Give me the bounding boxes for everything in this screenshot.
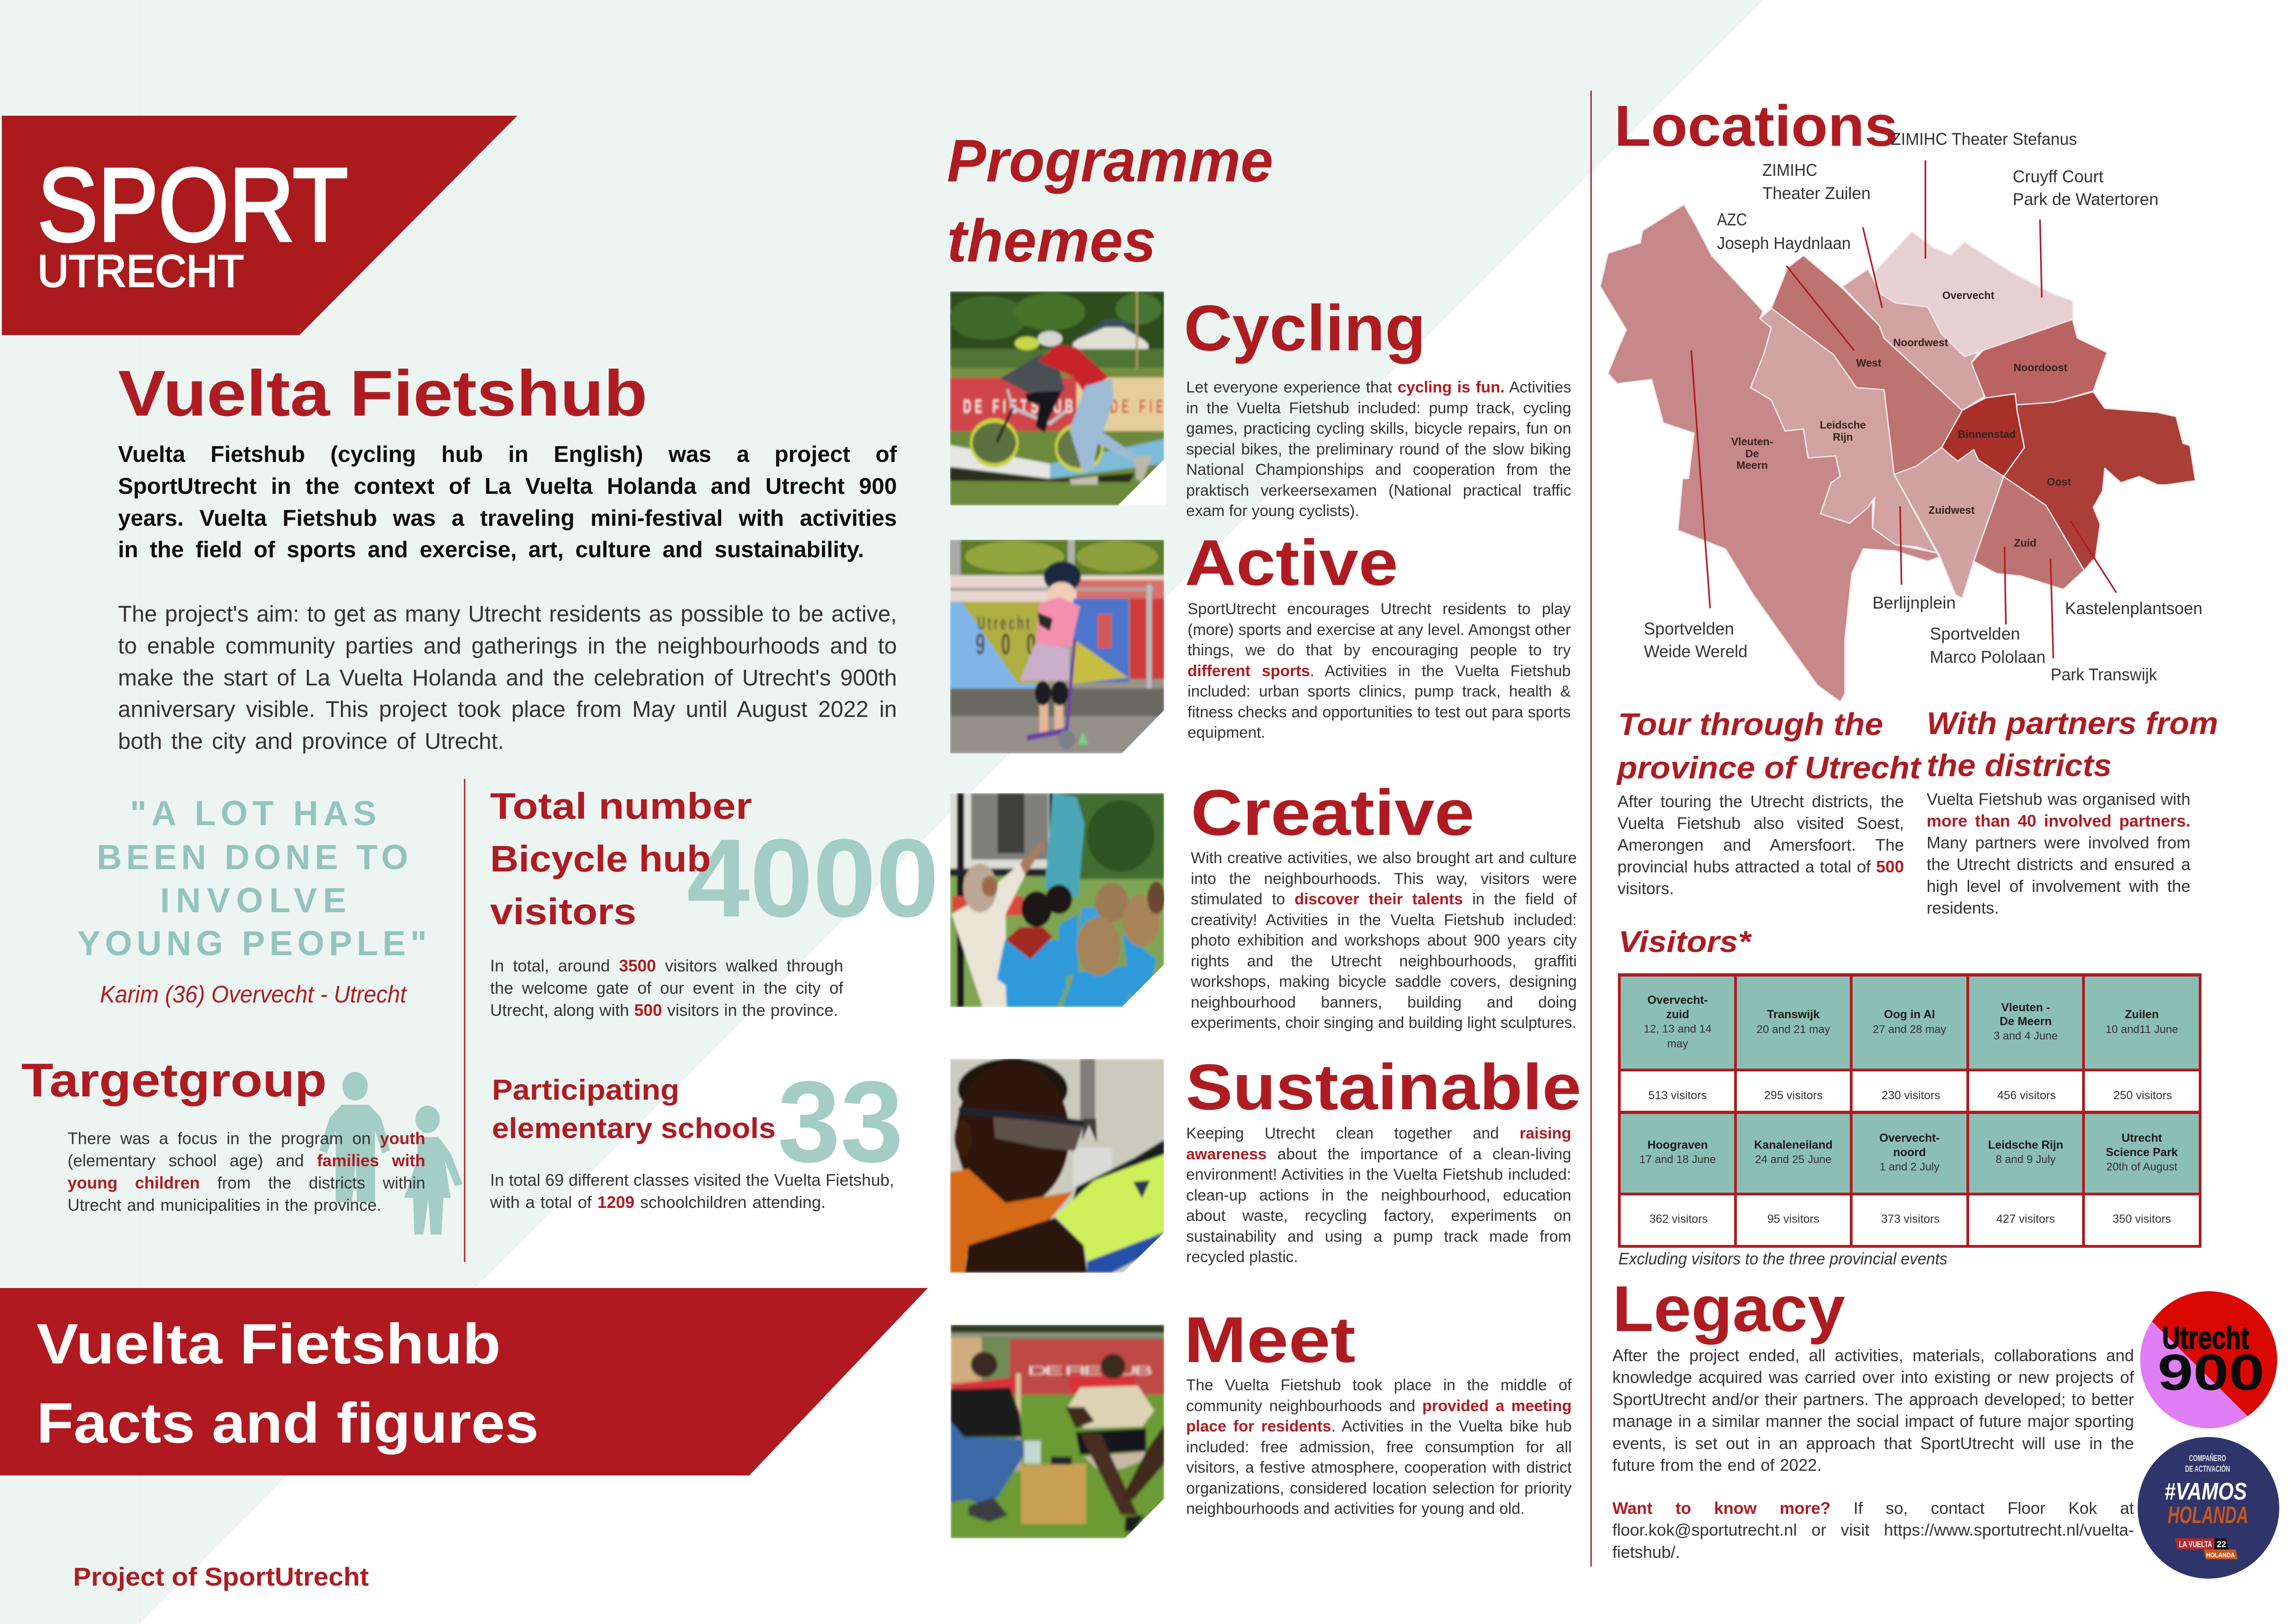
map location labels: AZC bbox=[1717, 210, 1747, 229]
text: target group: (elementary school age) and families with bbox=[68, 1151, 425, 1170]
map location labels: Park Transwijk bbox=[2051, 665, 2157, 684]
text: project aim: both the city and province of Utrecht. bbox=[118, 729, 504, 754]
text: creative: neighbourhood banners, building and doing bbox=[1191, 993, 1577, 1011]
text: meet: visitors, a festive atmosphere, cooperation with district bbox=[1186, 1459, 1572, 1476]
text: creative: creativity! Activities in the Vuelta Fietshub included: bbox=[1191, 911, 1577, 928]
text: legacy: future from the end of 2022. bbox=[1612, 1456, 1822, 1475]
logo: Utrecht 900 bbox=[2140, 1291, 2277, 1428]
table: visitors per location: Transwijk bbox=[1767, 1008, 1820, 1021]
table: visitors per location: 3 and 4 June bbox=[1994, 1030, 2058, 1042]
text: legacy: manage in a similar manner the social impact of future major sporting bbox=[1612, 1412, 2134, 1431]
map location labels: Marco Pololaan bbox=[1930, 647, 2046, 666]
table: visitors per location: 20 and 21 may bbox=[1757, 1023, 1830, 1036]
text: provincial tour: Vuelta Fietshub also visited Soest, bbox=[1617, 814, 1904, 833]
table: visitors per location: 8 and 9 July bbox=[1996, 1153, 2056, 1166]
text: intro bold: SportUtrecht in the context of La Vuelta Holanda and Utrecht 900 bbox=[118, 474, 897, 499]
text: active: different sports. Activities in the Vuelta Fietshub bbox=[1188, 662, 1571, 679]
text: sustainable: clean-up actions in the neighbourhood, education bbox=[1186, 1187, 1571, 1204]
heading: Cycling: Cycling bbox=[1184, 292, 1426, 364]
heading: Creative: Creative bbox=[1191, 776, 1474, 849]
text: provincial tour: visitors. bbox=[1617, 879, 1674, 898]
text: creative: workshops, making bicycle saddle covers, designing bbox=[1191, 973, 1577, 990]
text: meet: included: free admission, free consumption for all bbox=[1186, 1438, 1572, 1456]
text: partners: residents. bbox=[1927, 898, 1999, 917]
table: visitors per location: 24 and 25 June bbox=[1755, 1153, 1832, 1166]
table: visitors per location: 427 visitors bbox=[1996, 1213, 2055, 1226]
logo: Vamos Holanda: 22 bbox=[2217, 1540, 2226, 1549]
table: visitors per location: Leidsche Rijn bbox=[1988, 1139, 2063, 1151]
heading: Legacy: Legacy bbox=[1612, 1272, 1845, 1345]
text: provincial tour: After touring the Utrecht districts, the bbox=[1617, 792, 1904, 811]
photo: meet bbox=[951, 1325, 1164, 1538]
map: Utrecht districts: Meern bbox=[1736, 459, 1768, 471]
big number: 4000: 4000 bbox=[687, 816, 939, 940]
map: Utrecht districts bbox=[1600, 160, 2195, 702]
text: cycling: exam for young cyclists). bbox=[1186, 502, 1359, 520]
map: Utrecht districts: De bbox=[1745, 448, 1759, 460]
map: Utrecht districts: Binnenstad bbox=[1958, 428, 2016, 440]
text: contact: floor.kok@sportutrecht.nl or visit https://www.sportutrecht.nl/vuelta- bbox=[1612, 1520, 2134, 1539]
logo: Utrecht 900: Utrecht bbox=[2162, 1320, 2249, 1356]
logo banner: SportUtrecht bbox=[2, 116, 517, 335]
table: visitors per location: zuid bbox=[1666, 1008, 1689, 1021]
logo: Vamos Holanda: LA VUELTA bbox=[2179, 1540, 2212, 1549]
map: Utrecht districts: Noordoost bbox=[2014, 361, 2067, 373]
heading: Locations: Locations bbox=[1614, 94, 1898, 158]
text: sustainable: recycled plastic. bbox=[1186, 1248, 1298, 1266]
map: Utrecht districts: Vleuten- bbox=[1731, 436, 1773, 448]
text: partners bbox=[1927, 788, 2190, 919]
text: provincial tour bbox=[1617, 790, 1904, 899]
text: partners: the Utrecht districts and ensured a bbox=[1927, 855, 2190, 874]
heading: total number of visitors: visitors bbox=[490, 891, 636, 932]
quote: young people: YOUNG PEOPLE" bbox=[77, 924, 427, 963]
heading: participating schools: elementary schools bbox=[492, 1113, 776, 1145]
table: visitors per location: 373 visitors bbox=[1881, 1213, 1940, 1226]
text: creative: rights and the Utrecht neighbourhoods, graffiti bbox=[1191, 952, 1577, 970]
table: visitors per location: 456 visitors bbox=[1997, 1089, 2056, 1102]
text: total visitors: Utrecht, along with 500 visitors in the province. bbox=[490, 1001, 838, 1020]
table: visitors per location: 295 visitors bbox=[1764, 1089, 1822, 1102]
text: cycling: games, practicing cycling skills, bicycle repairs, fun on bbox=[1186, 420, 1571, 437]
table: visitors per location: Zuilen bbox=[2125, 1008, 2159, 1021]
table footnote: Excluding visitors to the three provincial events bbox=[1618, 1249, 1947, 1268]
heading: Programme themes: Programme bbox=[947, 127, 1273, 194]
heading: participating schools: Participating bbox=[492, 1074, 679, 1106]
text: sustainable: about waste, recycling factory, experiments on bbox=[1186, 1207, 1571, 1225]
table: visitors per location: 513 visitors bbox=[1648, 1089, 1707, 1102]
map location labels: Sportvelden bbox=[1644, 619, 1734, 638]
map location labels: ZIMIHC Theater Stefanus bbox=[1891, 130, 2077, 149]
text: meet: neighbourhoods and activities for young and old. bbox=[1186, 1500, 1525, 1518]
map location labels: Kastelenplantsoen bbox=[2065, 599, 2202, 618]
table: visitors per location bbox=[1618, 973, 2202, 1248]
photo: meet: DE FIET UB bbox=[1027, 1364, 1153, 1378]
text: sustainable: sustainability and using a pump track made from bbox=[1186, 1227, 1571, 1245]
icon: adult and child figures bbox=[319, 1072, 463, 1235]
heading: With partners from the districts: With partners from bbox=[1927, 706, 2218, 741]
map location labels: Theater Zuilen bbox=[1762, 184, 1871, 203]
map: Utrecht districts: Zuidwest bbox=[1928, 504, 1975, 516]
table: visitors per location: Overvecht- bbox=[1648, 994, 1708, 1007]
photo: active: Utrecht bbox=[977, 612, 1030, 634]
table: visitors per location: Utrecht bbox=[2121, 1132, 2162, 1145]
text: active: equipment. bbox=[1188, 724, 1265, 741]
map: Utrecht districts: Rijn bbox=[1833, 431, 1853, 443]
table: visitors per location: Science Park bbox=[2106, 1146, 2178, 1159]
map location labels bbox=[1644, 130, 2202, 684]
text: legacy: knowledge acquired was carried over into existing or new projects of bbox=[1612, 1368, 2134, 1387]
text: active: included: urban sports clinics, pump track, health & bbox=[1188, 683, 1571, 700]
text: active: (more) sports and exercise at any level. Amongst other bbox=[1188, 621, 1571, 639]
text: total visitors: In total, around 3500 visitors walked through bbox=[490, 956, 843, 975]
photo: active bbox=[950, 540, 1164, 753]
footer: project credit: Project of SportUtrecht bbox=[73, 1562, 369, 1591]
photo: creative bbox=[950, 793, 1165, 1007]
text: project aim bbox=[118, 598, 897, 758]
text: cycling: National Championships and cooperation from the bbox=[1186, 461, 1571, 479]
map: Utrecht districts: West bbox=[1856, 357, 1882, 369]
logo: Vamos Holanda bbox=[2138, 1437, 2279, 1579]
map: Utrecht districts: Overvecht bbox=[1942, 289, 1995, 301]
logo: Vamos Holanda: COMPAÑERO bbox=[2189, 1453, 2226, 1463]
table: visitors per location: 350 visitors bbox=[2113, 1213, 2171, 1226]
table: visitors per location: noord bbox=[1893, 1146, 1926, 1159]
quote: young people bbox=[77, 794, 427, 963]
text: provincial tour: Amerongen and Amersfoort. The bbox=[1617, 835, 1904, 854]
heading: participating schools bbox=[492, 1074, 776, 1145]
map location labels: Cruyff Court bbox=[2013, 167, 2104, 186]
text: intro bold: in the field of sports and exercise, art, culture and sustainability. bbox=[118, 537, 864, 562]
logo: Vamos Holanda: #VAMOS bbox=[2164, 1478, 2247, 1505]
photo: active: 900 bbox=[976, 628, 1036, 661]
heading: Programme themes: themes bbox=[947, 207, 1156, 274]
text: project aim: anniversary visible. This project took place from May until August 2022 in bbox=[118, 697, 897, 722]
logo: Vamos Holanda: DE ACTIVACIÓN bbox=[2185, 1464, 2230, 1474]
logo: Utrecht 900: 900 bbox=[2158, 1344, 2264, 1401]
logo: Vamos Holanda: HOLANDA bbox=[2206, 1551, 2235, 1559]
heading: Targetgroup: Targetgroup bbox=[21, 1054, 327, 1107]
text: target group: There was a focus in the program on youth bbox=[68, 1129, 425, 1148]
big number: 33: 33 bbox=[777, 1057, 903, 1186]
table: visitors per location: 12, 13 and 14 bbox=[1644, 1023, 1711, 1035]
heading: Programme themes bbox=[947, 127, 1273, 274]
text: provincial tour: provincial hubs attracted a total of 500 bbox=[1617, 857, 1904, 876]
table: visitors per location: 230 visitors bbox=[1882, 1089, 1940, 1102]
text: creative bbox=[1191, 848, 1577, 1033]
table: visitors per location: 250 visitors bbox=[2114, 1089, 2172, 1102]
text: meet bbox=[1186, 1375, 1572, 1519]
map location labels: Weide Wereld bbox=[1644, 642, 1748, 661]
title: Vuelta Fietshub: Vuelta Fietshub bbox=[118, 357, 647, 429]
table: visitors per location: 10 and11 June bbox=[2105, 1023, 2178, 1036]
table: visitors per location: Oog in Al bbox=[1884, 1008, 1935, 1021]
text: sustainable: awareness about the importance of a clean-living bbox=[1186, 1145, 1571, 1163]
text: active: things, we do that by encouraging people to try bbox=[1188, 641, 1571, 659]
text: project aim: The project's aim: to get as many Utrecht residents as possible to be active, bbox=[118, 602, 897, 627]
divider: left column bbox=[464, 779, 466, 1262]
heading: total number of visitors bbox=[490, 785, 752, 932]
text: legacy: events, is set out in an approach that SportUtrecht will use in the bbox=[1612, 1434, 2134, 1453]
banner: Facts and figures bbox=[0, 1288, 928, 1475]
text: partners: more than 40 involved partners. bbox=[1927, 811, 2190, 830]
heading: Tour through the province: Tour through the bbox=[1618, 707, 1883, 742]
map location labels: Joseph Haydnlaan bbox=[1717, 234, 1851, 253]
table: visitors per location: Hoograven bbox=[1648, 1139, 1708, 1151]
text: total visitors bbox=[490, 955, 843, 1021]
map location labels: ZIMIHC bbox=[1762, 161, 1817, 180]
quote: young people: INVOLVE bbox=[160, 881, 346, 920]
text: participating schools: In total 69 different classes visited the Vuelta Fietshub, bbox=[490, 1170, 894, 1189]
text: partners: Vuelta Fietshub was organised with bbox=[1927, 790, 2190, 809]
text: participating schools bbox=[490, 1169, 894, 1213]
text: active bbox=[1188, 599, 1571, 743]
heading: Meet: Meet bbox=[1184, 1303, 1356, 1376]
text: partners: high level of involvement with the bbox=[1927, 877, 2190, 896]
text: project aim: to enable community parties and gatherings in the neighbourhoods and to bbox=[118, 634, 897, 659]
text: cycling: Let everyone experience that cycling is fun. Activities bbox=[1186, 379, 1571, 396]
text: legacy: SportUtrecht and/or their partners. The approach developed; to better bbox=[1612, 1390, 2134, 1409]
table: visitors per location: Kanaleneiland bbox=[1754, 1139, 1833, 1151]
text: contact bbox=[1612, 1497, 2134, 1563]
table: visitors per location: Vleuten - bbox=[2001, 1001, 2050, 1014]
text: active: fitness checks and opportunities to test out para sports bbox=[1188, 703, 1571, 721]
heading: Visitors: Visitors* bbox=[1618, 925, 1752, 958]
text: creative: stimulated to discover their talents in the field of bbox=[1191, 890, 1577, 908]
photo: sustainable bbox=[950, 1058, 1164, 1273]
text: sustainable: Keeping Utrecht clean together and raising bbox=[1186, 1125, 1571, 1142]
table: visitors per location: 362 visitors bbox=[1649, 1213, 1708, 1226]
table: visitors per location: 27 and 28 may bbox=[1873, 1023, 1946, 1036]
text: intro bold: Vuelta Fietshub (cycling hub in English) was a project of bbox=[118, 442, 897, 467]
text: partners: Many partners were involved from bbox=[1927, 833, 2190, 852]
map location labels: Berlijnplein bbox=[1872, 593, 1956, 612]
text: legacy bbox=[1612, 1344, 2134, 1476]
map location labels: Sportvelden bbox=[1930, 624, 2020, 643]
heading: total number of visitors: Bicycle hub bbox=[490, 838, 711, 879]
text: meet: place for residents. Activities in the Vuelta bike hub bbox=[1186, 1418, 1572, 1435]
text: meet: organizations, considered location selection for priority bbox=[1186, 1479, 1572, 1497]
quote: young people: "A LOT HAS bbox=[130, 794, 376, 833]
map: Utrecht districts: Oost bbox=[2047, 476, 2071, 488]
logo banner: SportUtrecht: UTRECHT bbox=[37, 246, 244, 296]
text: contact: Want to know more? If so, contact Floor Kok at bbox=[1612, 1499, 2134, 1518]
table: visitors per location: Overvecht- bbox=[1879, 1132, 1940, 1145]
text: cycling: praktisch verkeersexamen (National practical traffic bbox=[1186, 481, 1571, 499]
photo: cycling: DE FIETSHUB bbox=[963, 396, 1073, 417]
map location labels: Park de Watertoren bbox=[2013, 190, 2158, 209]
map: Utrecht districts: Zuid bbox=[2014, 537, 2036, 549]
text: contact: fietshub/. bbox=[1612, 1543, 1680, 1562]
heading: total number of visitors: Total number bbox=[490, 785, 752, 827]
logo: Vamos Holanda: HOLANDA bbox=[2168, 1502, 2248, 1529]
text: total visitors: the welcome gate of our event in the city of bbox=[490, 978, 843, 997]
text: meet: The Vuelta Fietshub took place in the middle of bbox=[1186, 1376, 1572, 1394]
text: target group: young children from the districts within bbox=[68, 1173, 425, 1192]
table: visitors per location: 1 and 2 July bbox=[1879, 1161, 1940, 1173]
text: target group bbox=[68, 1127, 425, 1216]
text: sustainable: environment! Activities in the Vuelta Fietshub included: bbox=[1186, 1166, 1571, 1183]
map: Utrecht districts: Noordwest bbox=[1893, 336, 1948, 348]
text: meet: community neighbourhoods and provided a meeting bbox=[1186, 1397, 1572, 1414]
text: cycling: in the Vuelta Fietshub included: pump track, cycling bbox=[1186, 399, 1571, 417]
text: intro bold bbox=[118, 439, 897, 566]
heading: Active: Active bbox=[1185, 526, 1398, 599]
table: visitors per location: 17 and 18 June bbox=[1639, 1153, 1716, 1166]
table: visitors per location: may bbox=[1667, 1038, 1688, 1050]
photo: cycling bbox=[949, 291, 1166, 505]
divider: right column bbox=[1590, 91, 1592, 1567]
text: creative: photo exhibition and workshops about 900 years city bbox=[1191, 932, 1577, 949]
heading: Tour through the province bbox=[1616, 707, 1922, 785]
text: creative: With creative activities, we also brought art and culture bbox=[1191, 849, 1577, 867]
text: creative: experiments, choir singing and building light sculptures. bbox=[1191, 1014, 1576, 1032]
text: legacy: After the project ended, all activities, materials, collaborations and bbox=[1612, 1346, 2134, 1365]
text: participating schools: with a total of 1209 schoolchildren attending. bbox=[490, 1193, 826, 1212]
photo: cycling: DE FIE bbox=[1110, 396, 1163, 417]
text: intro bold: years. Vuelta Fietshub was a traveling mini-festival with activities bbox=[118, 506, 897, 531]
quote: young people: BEEN DONE TO bbox=[97, 838, 408, 877]
banner: Facts and figures: Facts and figures bbox=[37, 1392, 539, 1455]
text: creative: into the neighbourhoods. This way, visitors were bbox=[1191, 870, 1577, 888]
table: visitors per location: 20th of August bbox=[2106, 1161, 2177, 1173]
heading: With partners from the districts: the districts bbox=[1927, 748, 2112, 783]
table: visitors per location: De Meern bbox=[2000, 1015, 2052, 1028]
map: Utrecht districts: Leidsche bbox=[1820, 419, 1866, 431]
text: active: SportUtrecht encourages Utrecht residents to play bbox=[1188, 600, 1571, 618]
text: project aim: make the start of La Vuelta Holanda and the celebration of Utrecht's 900th bbox=[118, 666, 897, 691]
logo banner: SportUtrecht: SPORT bbox=[37, 146, 348, 263]
text: cycling: special bikes, the preliminary round of the slow biking bbox=[1186, 441, 1571, 458]
text: sustainable bbox=[1186, 1123, 1571, 1267]
table: visitors per location: 95 visitors bbox=[1767, 1213, 1819, 1226]
quote attribution: Karim (36) Overvecht - Utrecht bbox=[100, 981, 407, 1008]
heading: Sustainable: Sustainable bbox=[1186, 1051, 1581, 1123]
text: target group: Utrecht and municipalities in the province. bbox=[68, 1195, 381, 1214]
heading: With partners from the districts bbox=[1927, 706, 2218, 783]
heading: Tour through the province: province of Utrecht bbox=[1616, 750, 1922, 785]
banner: Facts and figures: Vuelta Fietshub bbox=[37, 1313, 501, 1376]
text: cycling bbox=[1186, 377, 1571, 521]
